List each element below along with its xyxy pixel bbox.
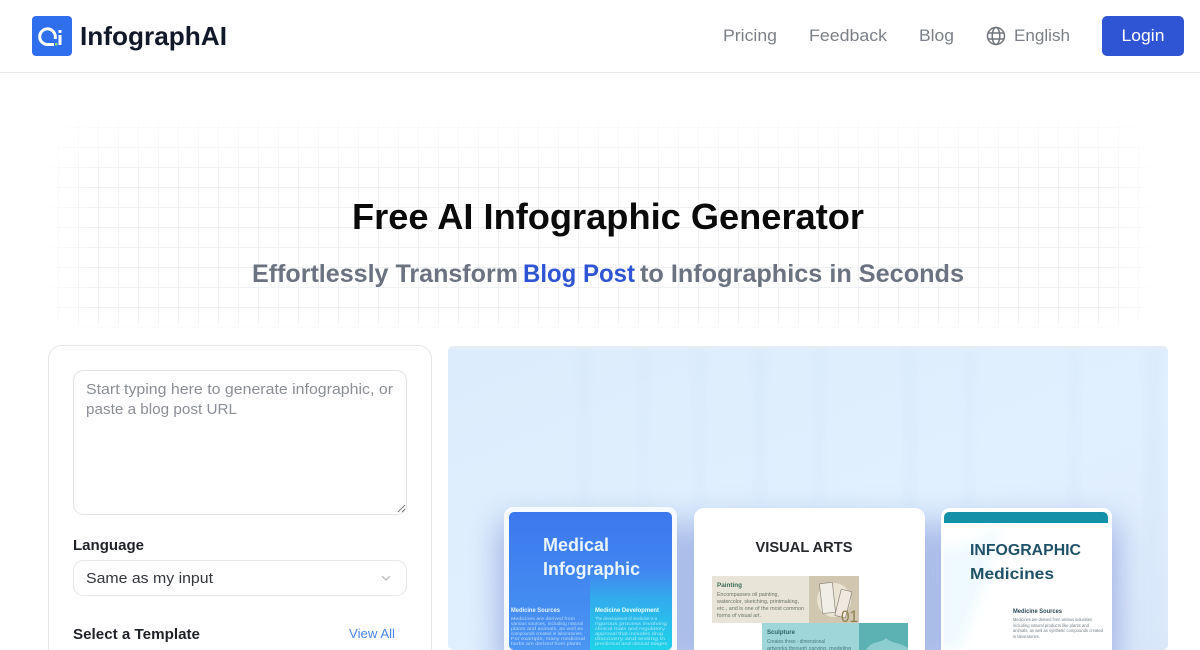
header bar: [0, 0, 1200, 73]
view all link: View All: [349, 626, 395, 641]
nav: Feedback: Feedback: [809, 26, 888, 45]
block: sculpture: Creates three - dimensional: [767, 639, 825, 645]
column: medicine development: rigorous process involving: [595, 621, 668, 626]
column: medicine development: [595, 608, 668, 646]
block: painting: Painting: [717, 583, 742, 589]
card: visual arts: [694, 508, 925, 650]
card shadows: [500, 522, 1116, 650]
text area: paste a blog post URL: [86, 401, 237, 418]
card heading: VISUAL ARTS: [756, 539, 852, 556]
column: medicine development: Medicine Development: [595, 608, 659, 614]
column: medicine sources: plants and animals, as well as: [511, 626, 584, 631]
block: sculpture: [762, 623, 908, 650]
template label: Select a Template: [73, 626, 200, 643]
column: medicine development: discovery and testing in: [595, 636, 666, 641]
nav: Blog: Blog: [919, 26, 954, 45]
subtitle: Blog Post: [523, 260, 636, 288]
column: medicine development: approval that includes drug: [595, 631, 664, 636]
login button: Login: [1122, 26, 1164, 45]
language label: Language: [73, 537, 144, 554]
language select: [74, 560, 406, 596]
card: infographic medicines: Medicines: [970, 566, 1054, 583]
column: medicine sources: Medicines are derived from: [511, 616, 575, 621]
column: medicine development: The development of medicine is a: [595, 616, 657, 621]
block: medicine sources: including natural products like plants and: [1013, 623, 1089, 628]
card heading: INFOGRAPHIC: [970, 542, 1081, 559]
logo: [32, 16, 227, 56]
card heading: Medical: [543, 535, 609, 555]
subtitle: [252, 260, 964, 288]
block: medicine sources: [1013, 609, 1103, 639]
background grid: [40, 107, 1160, 329]
card: infographic medicines: [935, 508, 1112, 650]
column: medicine sources: compounds created in laboratories.: [511, 631, 583, 636]
block: painting: etc., and is one of the most common: [717, 606, 804, 612]
column: medicine sources: [511, 608, 585, 646]
card: medical infographic: Infographic: [543, 559, 640, 579]
panel: template preview: [448, 346, 1168, 650]
subtitle: Effortlessly Transform: [252, 260, 518, 288]
block: medicine sources: Medicines are derived from various industries: [1013, 617, 1093, 622]
column: medicine development: preclinical and clinical stages: [595, 641, 668, 646]
block: medicine sources: in laboratories.: [1013, 634, 1040, 639]
block: medicine sources: Medicine Sources: [1013, 609, 1063, 615]
block: painting: Encompasses oil painting,: [717, 592, 779, 598]
login button: [1102, 16, 1184, 56]
nav: Pricing: Pricing: [723, 26, 777, 45]
block: medicine sources: animals, as well as synthetic compounds created: [1013, 628, 1103, 633]
block: painting: forms of visual art.: [717, 613, 761, 619]
block: painting: watercolor, sketching, printmaking,: [717, 599, 799, 605]
column: medicine sources: For example, many medicinal: [511, 636, 585, 641]
nav: English: English: [1014, 26, 1070, 45]
icon: painting frames: [817, 582, 852, 618]
panel: input form: [48, 346, 432, 650]
text area: [74, 370, 406, 514]
column: medicine sources: Medicine Sources: [511, 608, 561, 614]
block: sculpture: Sculpture: [767, 630, 796, 636]
card: medical infographic: [504, 507, 677, 650]
soft vertical streaks: [580, 350, 1161, 650]
title: Free AI Infographic Generator: [352, 196, 864, 237]
top bar: [944, 512, 1108, 523]
icon: logo mark: [32, 16, 72, 56]
block: painting: 01: [841, 607, 858, 626]
icon: globe: [988, 28, 1004, 44]
language select: Same as my input: [86, 570, 214, 587]
wordmark: InfographAI: [80, 21, 227, 51]
column: medicine sources: various sources, including natural: [511, 621, 583, 626]
block: painting: [712, 576, 859, 626]
column: medicine development: clinical trials and regulatory: [595, 626, 666, 631]
column: medicine sources: herbs are derived from plants: [511, 641, 582, 646]
subtitle: to Infographics in Seconds: [640, 260, 964, 288]
text area: Start typing here to generate infographic, or: [86, 381, 393, 398]
